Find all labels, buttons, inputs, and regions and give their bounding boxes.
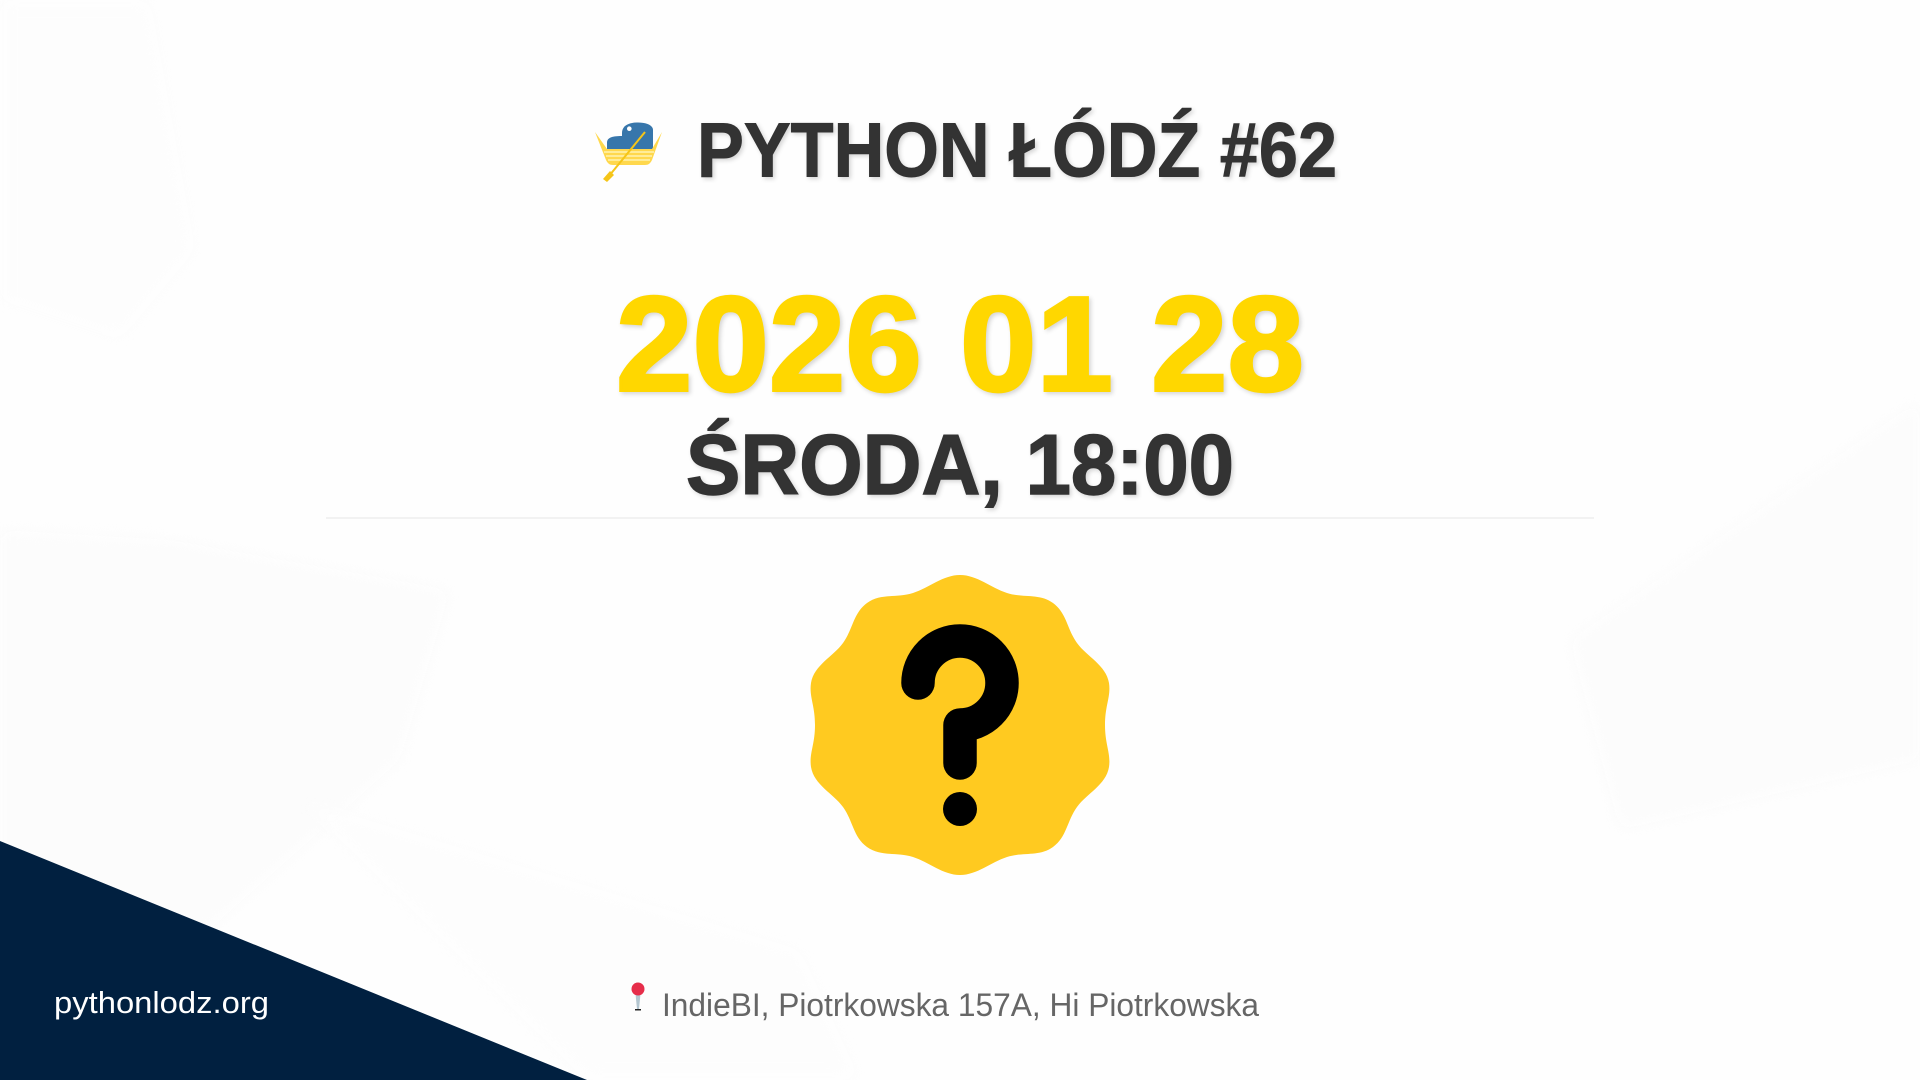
icon: location pin: [632, 982, 644, 1010]
icon: question mark badge: [811, 575, 1109, 875]
title: PYTHON ŁÓDŹ #62: [697, 108, 1337, 194]
date: 2026 01 28: [616, 268, 1304, 420]
corner triangle: [0, 841, 587, 1080]
venue address: IndieBI, Piotrkowska 157A, Hi Piotrkowska: [662, 987, 1259, 1023]
website link: pythonlodz.org: [54, 985, 269, 1020]
day and time: ŚRODA, 18:00: [686, 418, 1234, 513]
icon: Python Łódź logo: [595, 122, 662, 182]
